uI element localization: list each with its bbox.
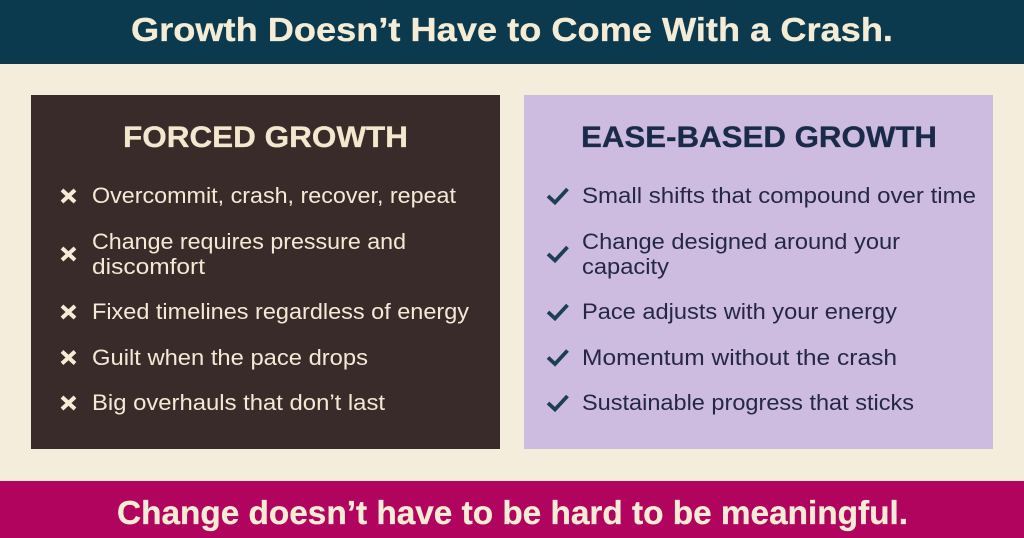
item: pressure: [62, 229, 406, 279]
panel: forced growth: [31, 95, 500, 449]
footer message: Change doesn’t have to be hard to be meaningful.: [117, 494, 908, 531]
footer banner: [0, 481, 1024, 538]
item: small shifts: Small shifts that compound over time: [582, 183, 976, 208]
panel: ease-based growth: [524, 95, 993, 449]
item: pressure: Change requires pressure and: [92, 229, 406, 254]
item: overcommit: Overcommit, crash, recover, repeat: [92, 183, 457, 208]
heading: forced growth: FORCED GROWTH: [123, 121, 408, 154]
item: capacity: [548, 229, 901, 279]
item: timelines: Fixed timelines regardless of energy: [92, 299, 470, 324]
item: momentum: Momentum without the crash: [582, 345, 897, 370]
item: guilt: Guilt when the pace drops: [92, 345, 368, 370]
item: overhauls: Big overhauls that don’t last: [92, 390, 386, 415]
item: capacity: Change designed around your: [582, 229, 901, 254]
heading: ease-based growth: EASE-BASED GROWTH: [581, 121, 937, 154]
item: pressure: discomfort: [92, 254, 206, 279]
item: capacity: capacity: [582, 254, 670, 279]
title: Growth Doesn’t Have to Come With a Crash.: [131, 11, 893, 48]
title banner: [0, 0, 1024, 64]
item: pace: Pace adjusts with your energy: [582, 299, 898, 324]
item: sustainable: Sustainable progress that sticks: [582, 390, 914, 415]
